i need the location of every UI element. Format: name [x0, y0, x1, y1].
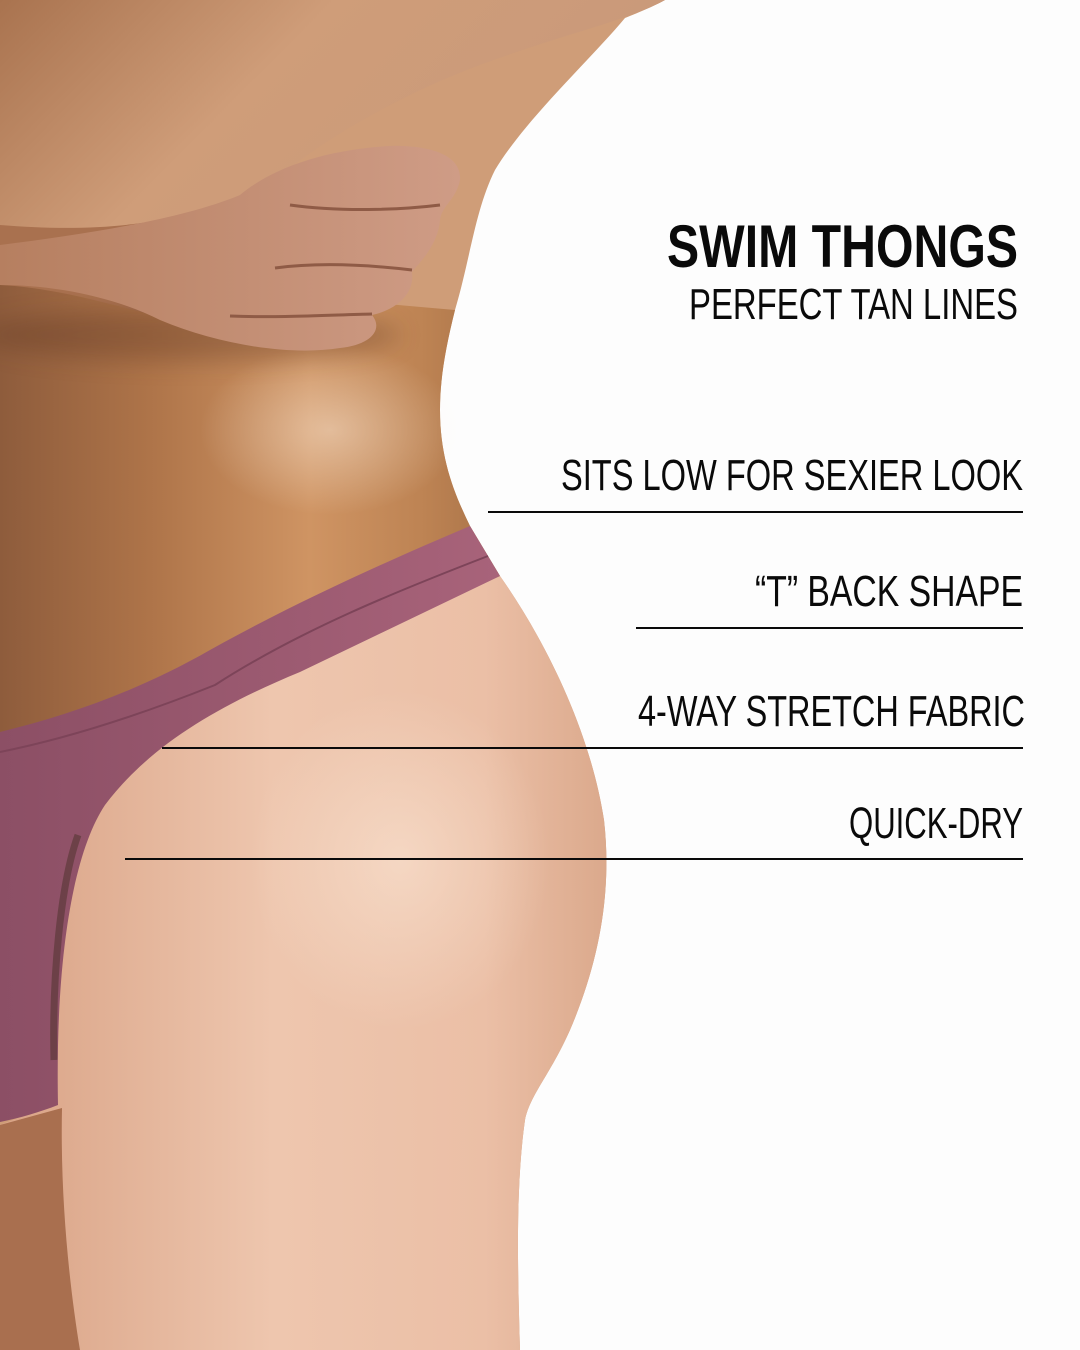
crease shadow [54, 835, 78, 1060]
photo: swim thong fabric [0, 526, 500, 1122]
lower left shade [0, 1108, 80, 1350]
stitching [0, 556, 488, 752]
finger gaps [230, 205, 440, 317]
chest shadow [0, 170, 300, 340]
torso [0, 270, 500, 760]
lower body [0, 576, 606, 1350]
upper arm [0, 0, 665, 235]
torso highlight [200, 345, 460, 515]
base silhouette [0, 0, 665, 1350]
photo: body silhouette [0, 0, 665, 1350]
lower body highlight [250, 690, 550, 1030]
photo: hand [0, 146, 460, 351]
waist shadow under hand [0, 309, 400, 361]
